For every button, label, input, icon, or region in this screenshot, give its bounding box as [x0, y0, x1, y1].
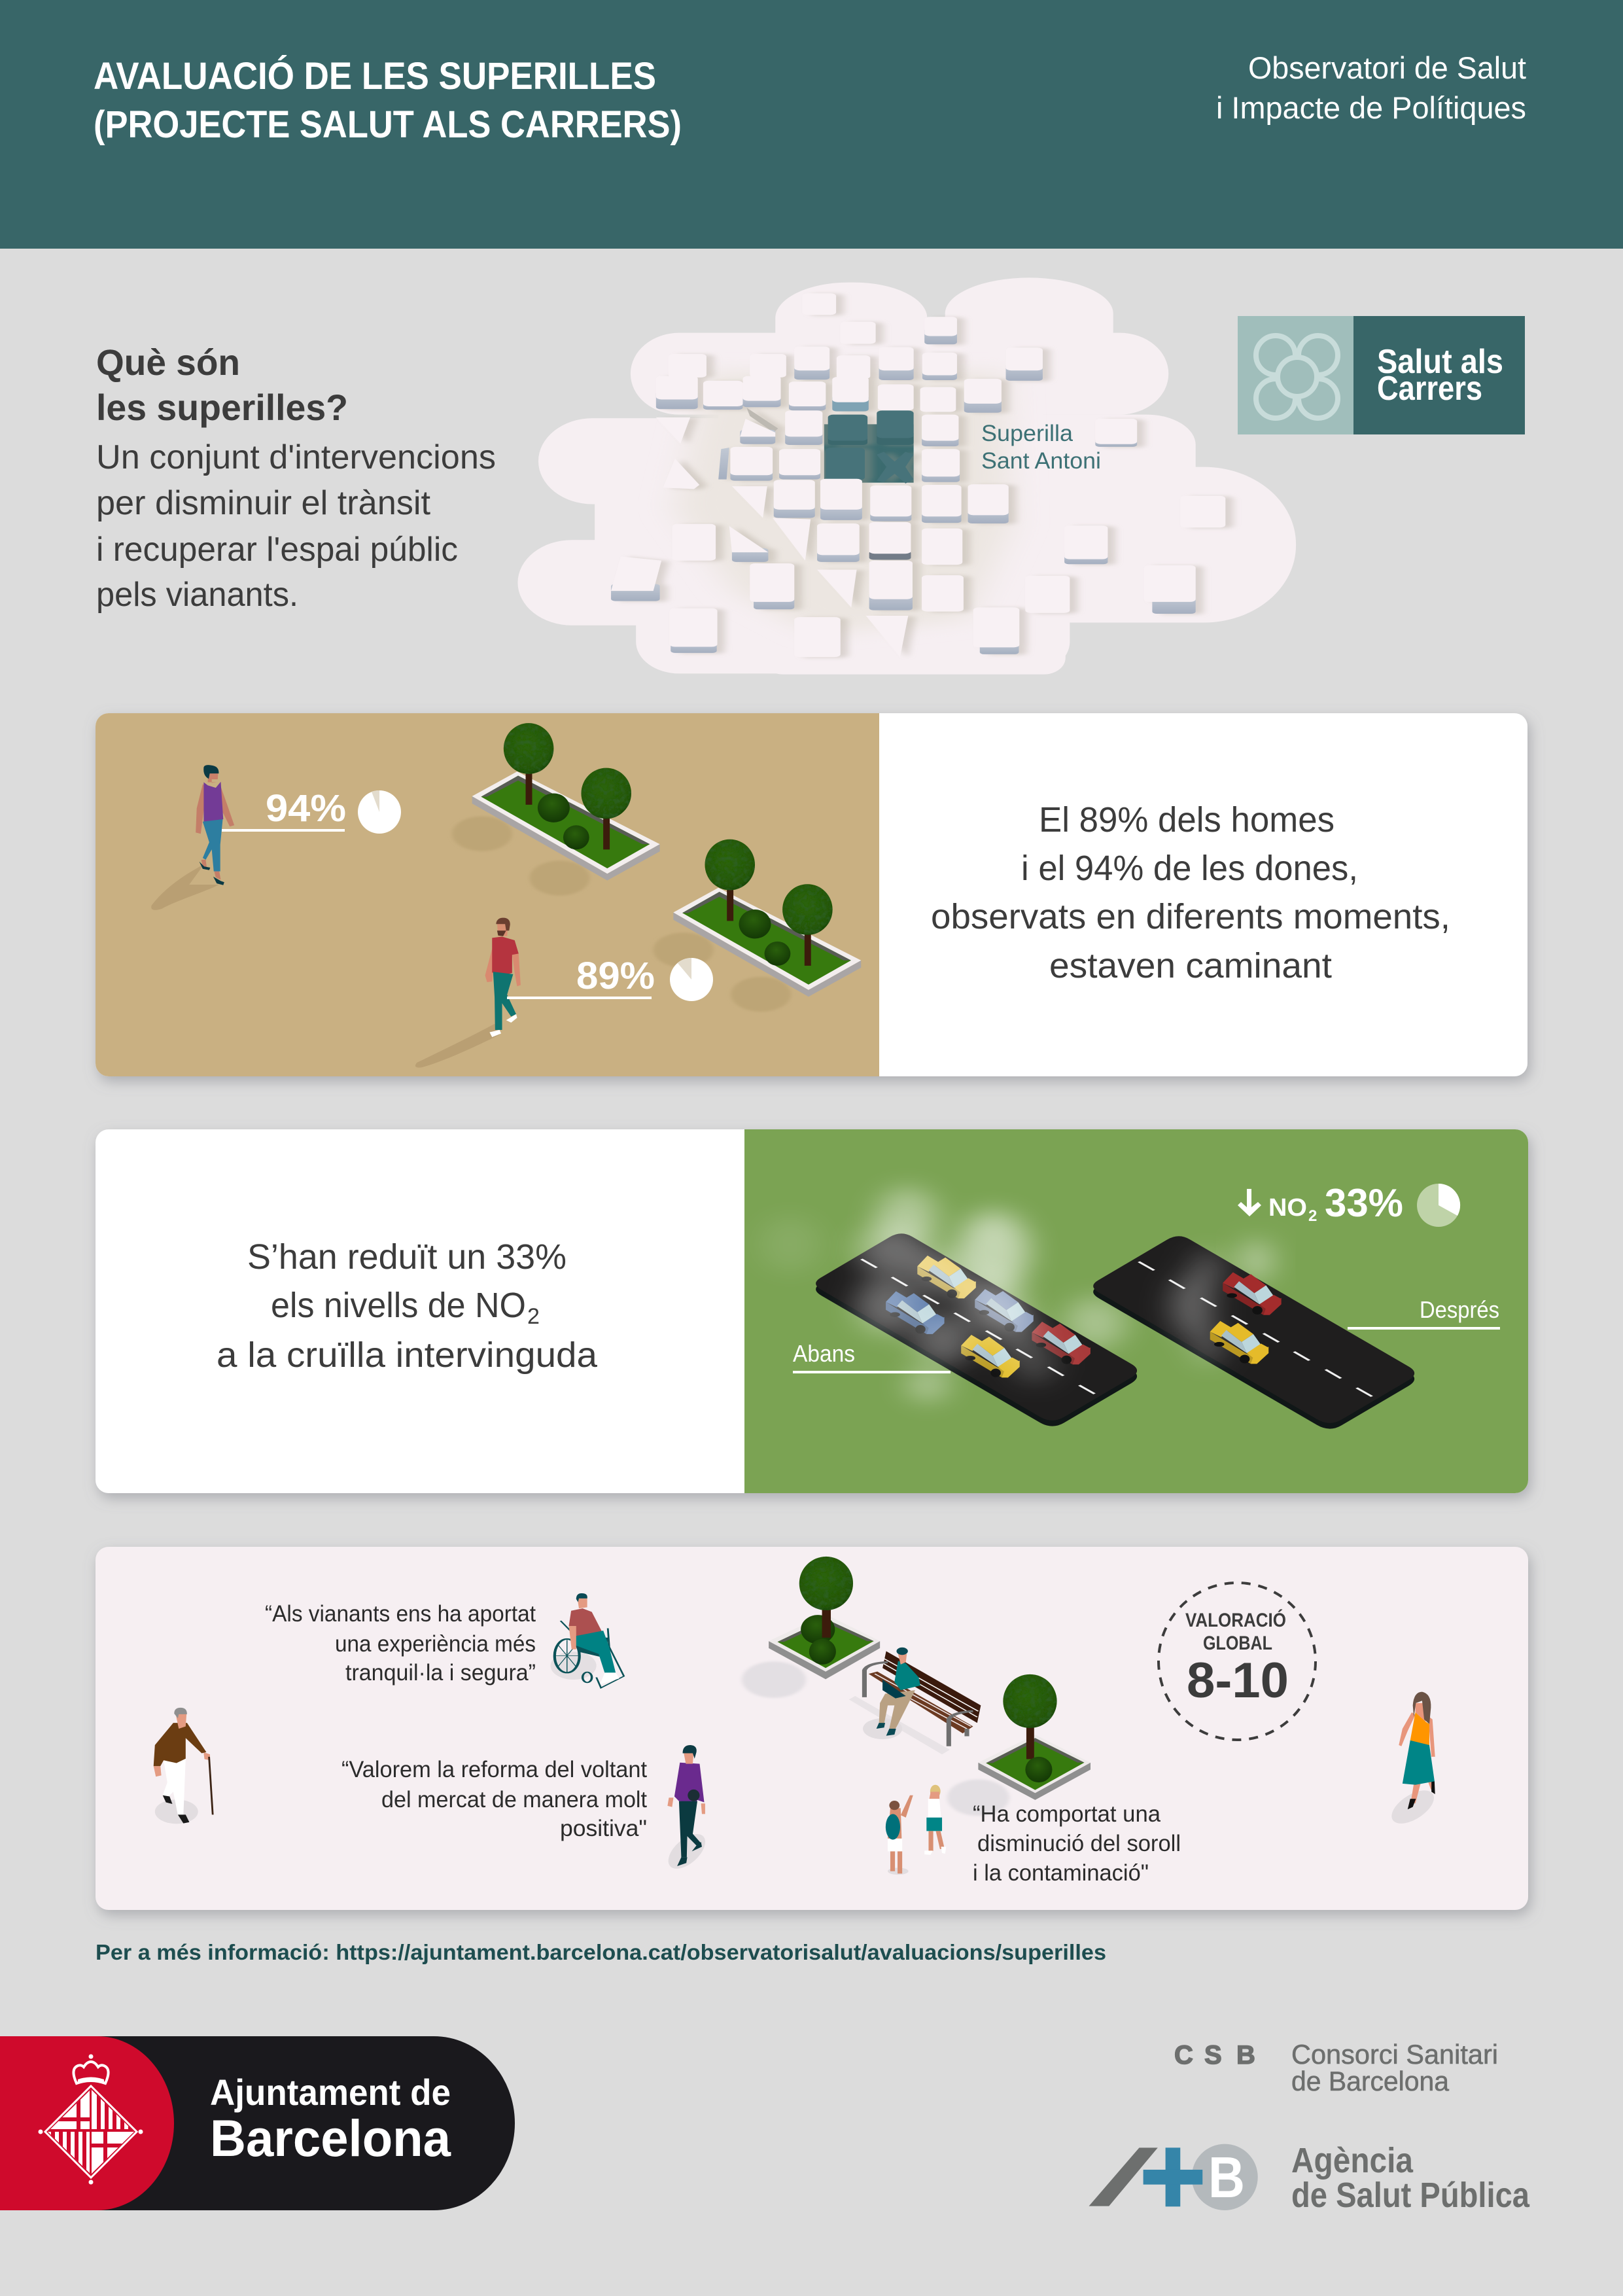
text: walking finding: El 89% dels homes — [1039, 800, 1335, 839]
illustration: woman in purple — [661, 1745, 713, 1871]
intro text: what are superblocks: pels vianants. — [96, 576, 298, 614]
quote: noise: “Ha comportat una — [973, 1801, 1161, 1827]
callout: 94% — [222, 787, 401, 834]
panel: citizen opinions — [96, 1547, 1528, 1910]
quote: pedestrians — [265, 1601, 536, 1686]
quote: noise — [973, 1801, 1181, 1886]
logo: Ajuntament de Barcelona — [0, 2036, 515, 2210]
header band — [0, 0, 1623, 249]
quote: market — [341, 1757, 647, 1841]
icon: flower tile — [1256, 336, 1338, 418]
observatory name: Observatori de Salut — [1248, 50, 1526, 85]
intro text: what are superblocks: les superilles? — [96, 387, 348, 428]
logo: Consorci Sanitari de Barcelona: C — [1174, 2041, 1193, 2070]
badge: overall rating: VALORACIÓ — [1185, 1609, 1286, 1631]
text: walking finding: observats en diferents moments, — [931, 897, 1450, 936]
quote: pedestrians: tranquil·la i segura” — [345, 1660, 536, 1686]
logo: Salut als Carrers — [1238, 316, 1525, 434]
logo: Consorci Sanitari de Barcelona: B — [1236, 2041, 1255, 2070]
illustration: children — [886, 1785, 946, 1875]
quote: noise: i la contaminació" — [973, 1860, 1149, 1886]
callout: 89% — [507, 955, 713, 1001]
3D map of the superblock — [517, 277, 1296, 675]
observatory name: i Impacte de Polítiques — [1216, 90, 1526, 125]
quote: noise: disminució del soroll — [977, 1831, 1181, 1856]
illustration: woman in orange — [1383, 1692, 1442, 1826]
logo text — [1377, 343, 1503, 408]
logo text: Carrers — [1377, 370, 1482, 408]
logo: Consorci Sanitari de Barcelona — [1174, 2039, 1498, 2096]
intro text: what are superblocks: Què són — [96, 342, 240, 383]
text: NO2 finding: a la cruïlla intervinguda — [217, 1335, 598, 1375]
title — [94, 55, 682, 146]
logo: Consorci Sanitari de Barcelona: de Barcelona — [1291, 2066, 1450, 2096]
label: Després — [1348, 1296, 1500, 1330]
logo text: Salut als — [1377, 343, 1503, 381]
callout: 94%: 94% — [266, 787, 346, 830]
logo: Consorci Sanitari de Barcelona: S — [1204, 2041, 1222, 2070]
illustration: old man with cane — [154, 1708, 213, 1824]
callout: NO2 down 33%: NO — [1268, 1194, 1307, 1222]
text: NO2 finding: 2 — [527, 1304, 540, 1329]
icon: A+B mark: B — [1208, 2145, 1245, 2210]
illustration: planters — [452, 723, 861, 1012]
intro text: what are superblocks: Un conjunt d'intervencions — [96, 438, 496, 476]
quote: market: positiva" — [560, 1816, 647, 1841]
map label: Superilla Sant Antoni — [981, 421, 1101, 474]
quote: pedestrians: “Als vianants ens ha aportat — [265, 1601, 536, 1627]
logo text: Barcelona — [210, 2109, 451, 2167]
title: AVALUACIÓ DE LES SUPERILLES — [94, 55, 656, 97]
badge: overall rating: GLOBAL — [1203, 1633, 1272, 1654]
quote: market: “Valorem la reforma del voltant — [341, 1757, 647, 1782]
label: Abans — [793, 1340, 951, 1373]
link: more information: Per a més informació: https://ajuntament.barcelona.cat/observatorisalut/avaluacions/superilles — [96, 1940, 1106, 1964]
title: (PROJECTE SALUT ALS CARRERS) — [94, 103, 682, 146]
label: Després: Després — [1420, 1296, 1499, 1323]
illustration: second planter and tree — [947, 1674, 1091, 1816]
text: walking finding — [931, 800, 1450, 985]
label: Abans: Abans — [793, 1340, 855, 1367]
illustration: man in wheelchair — [551, 1593, 624, 1688]
intro text: what are superblocks: i recuperar l'espai públic — [96, 531, 458, 569]
icon: A+B mark — [1089, 2144, 1258, 2210]
text: NO2 finding: els nivells de NO — [271, 1286, 526, 1325]
map label: Superilla Sant Antoni: Superilla — [981, 421, 1073, 446]
callout: NO2 down 33% — [1238, 1181, 1460, 1227]
logo: Agència de Salut Pública — [1089, 2141, 1530, 2215]
badge: overall rating: 8-10 — [1187, 1653, 1289, 1708]
illustration: planter and tree — [742, 1557, 880, 1698]
quote: market: del mercat de manera molt — [381, 1787, 647, 1812]
panel: air quality — [96, 1129, 1528, 1493]
callout: 89%: 89% — [576, 955, 655, 997]
illustration: man walking — [415, 918, 521, 1068]
illustration: woman walking — [151, 765, 234, 910]
logo text — [210, 2072, 451, 2167]
callout: NO2 down 33%: 2 — [1308, 1207, 1317, 1225]
panel: walking — [96, 713, 1527, 1076]
text: walking finding: estaven caminant — [1049, 946, 1332, 985]
illustration: road after — [1093, 1236, 1414, 1429]
map label: Superilla Sant Antoni: Sant Antoni — [981, 448, 1101, 474]
logo text — [1291, 2141, 1530, 2215]
intro text: what are superblocks: per disminuir el trànsit — [96, 484, 431, 522]
icon: city crest — [38, 2055, 143, 2184]
logo text: de Salut Pública — [1291, 2176, 1530, 2215]
illustration: man on bench — [849, 1648, 981, 1754]
intro text: what are superblocks — [96, 342, 496, 614]
observatory name — [1216, 50, 1526, 125]
quote: pedestrians: una experiència més — [335, 1631, 536, 1657]
callout: NO2 down 33%: 33% — [1325, 1181, 1403, 1225]
teal superilla area — [824, 424, 914, 483]
text: NO2 finding — [217, 1237, 598, 1375]
text: walking finding: i el 94% de les dones, — [1021, 849, 1358, 888]
logo: Consorci Sanitari de Barcelona: Consorci Sanitari — [1291, 2039, 1498, 2070]
logo text: Agència — [1291, 2141, 1414, 2180]
badge: overall rating — [1159, 1583, 1316, 1740]
text: NO2 finding: S’han reduït un 33% — [247, 1237, 567, 1277]
illustration: road before — [759, 1188, 1137, 1426]
logo text: Ajuntament de — [210, 2072, 451, 2113]
